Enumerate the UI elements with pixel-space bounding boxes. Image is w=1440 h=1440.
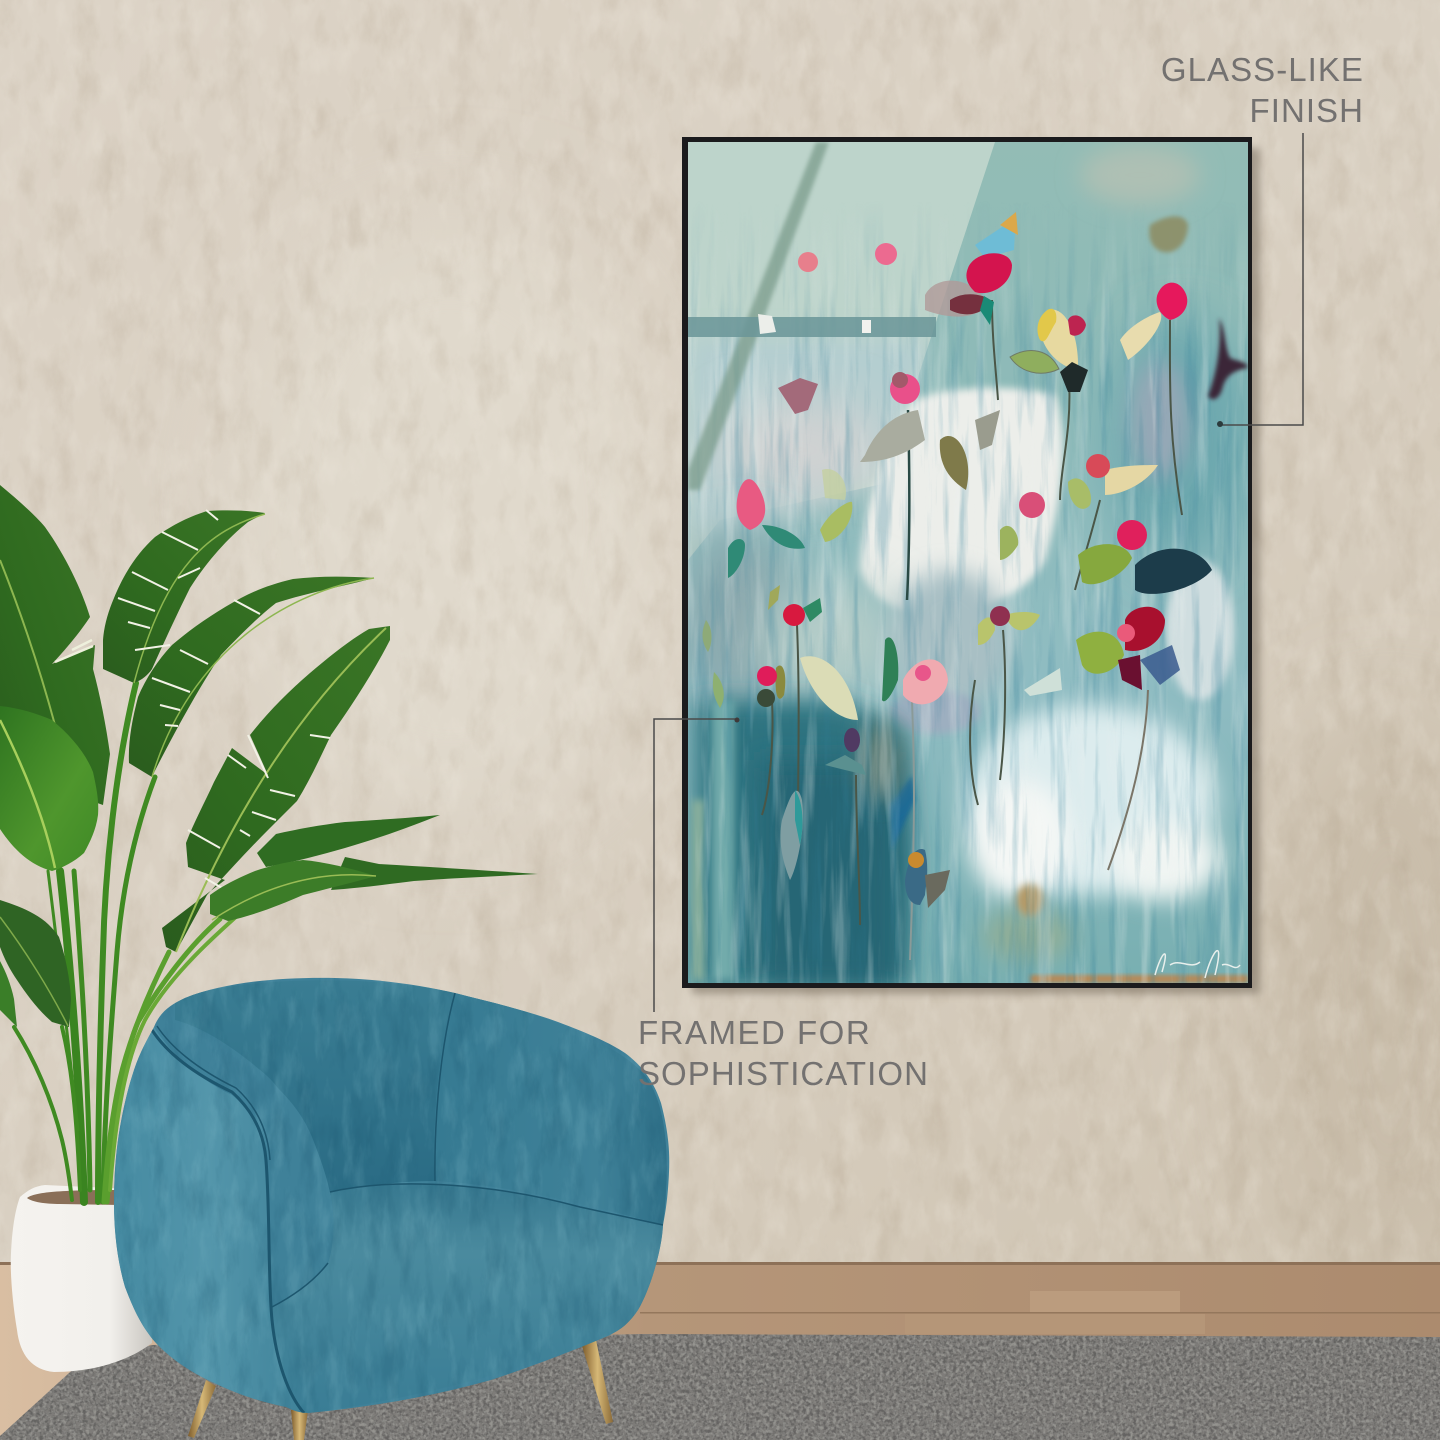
glass reflection <box>688 142 936 490</box>
plant stems <box>14 683 255 1202</box>
callout: glass-like finish <box>1161 51 1364 427</box>
dark accent <box>1208 318 1248 399</box>
paint drips <box>688 200 1248 983</box>
leaf: lower left <box>0 900 71 1027</box>
leaf: large left <box>0 706 98 871</box>
callout: framed for sophistication: SOPHISTICATION <box>638 1055 929 1092</box>
leaf: large right <box>162 626 390 952</box>
chair right back <box>434 993 667 1225</box>
callout text: GLASS-LIKE <box>1161 51 1364 88</box>
framed painting <box>680 137 1260 994</box>
chair seat <box>271 1184 663 1413</box>
leaf: second <box>103 510 265 683</box>
chair piping <box>152 1030 304 1413</box>
chair front arm <box>114 1027 304 1413</box>
chair inner back <box>175 980 455 1195</box>
leader line <box>1221 133 1303 425</box>
plant pot <box>11 1185 152 1372</box>
leaves <box>702 309 1212 880</box>
leaf: lower right trio <box>210 815 538 921</box>
leader line <box>654 719 735 1012</box>
callout text: FRAMED FOR <box>638 1014 871 1051</box>
chair body <box>114 978 669 1413</box>
leaf: upper left <box>0 485 110 805</box>
flowers <box>737 212 1187 908</box>
frame <box>682 137 1252 988</box>
rug <box>0 1330 1440 1440</box>
callout: glass-like finish: FINISH <box>1250 92 1364 129</box>
flower stems <box>762 300 1182 960</box>
velvet texture <box>100 970 680 1420</box>
painting canvas <box>680 142 1250 985</box>
signature <box>1155 951 1240 978</box>
callout: framed for sophistication <box>638 718 929 1092</box>
chair left arm top <box>160 1022 333 1307</box>
plant <box>0 485 538 1202</box>
color washes <box>680 142 1250 985</box>
chair legs <box>188 1340 613 1440</box>
armchair <box>100 970 680 1440</box>
painting shadow <box>692 148 1260 994</box>
wood floor <box>0 1262 1440 1440</box>
leaf: third <box>129 577 374 777</box>
